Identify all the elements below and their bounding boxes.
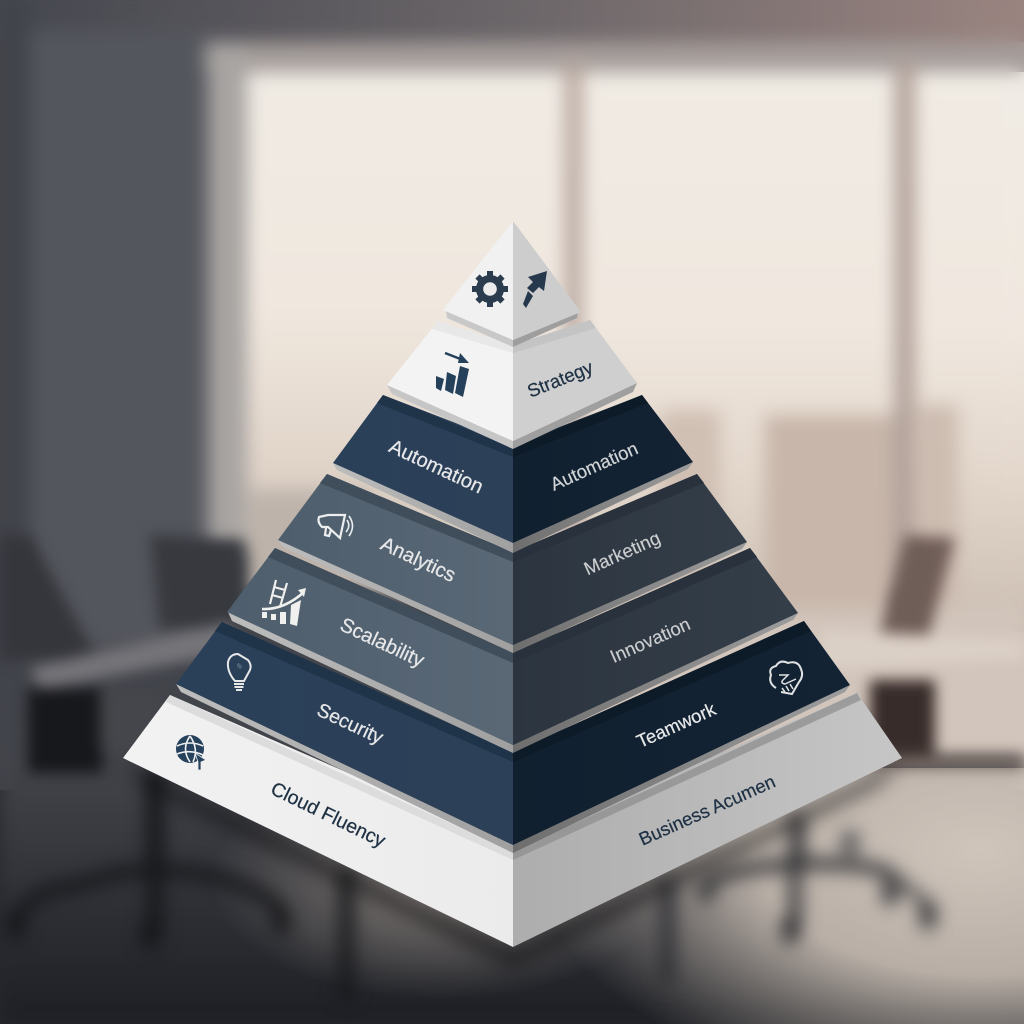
- icon: gear: [472, 271, 508, 307]
- pyramid: [123, 221, 902, 947]
- label: Automation (left): Automation: [386, 436, 486, 498]
- label: Analytics: Analytics: [377, 533, 459, 587]
- label: Cloud Fluency: Cloud Fluency: [267, 778, 389, 852]
- label: Strategy: Strategy: [524, 356, 597, 402]
- label: Security: Security: [313, 699, 387, 749]
- tier 3: navy: [333, 395, 693, 553]
- tier 5: grey: [227, 548, 798, 753]
- tier 7: base: [123, 693, 902, 947]
- label: Business Acumen: Business Acumen: [636, 770, 778, 850]
- label: Teamwork: Teamwork: [633, 698, 719, 752]
- icon: diagonal arrow: [523, 271, 547, 308]
- icon: megaphone: [318, 515, 352, 538]
- label: Automation (right): Automation: [547, 437, 641, 495]
- label: Innovation: Innovation: [607, 613, 693, 667]
- tier 4: grey: [278, 474, 747, 653]
- pyramid drop shadow: [123, 762, 902, 968]
- tier 1: apex: [443, 221, 581, 347]
- icon: globe with cursor: [176, 735, 206, 770]
- label: Marketing: Marketing: [581, 527, 663, 579]
- label: Scalability: Scalability: [337, 614, 427, 672]
- tier 6: navy: [176, 621, 850, 853]
- icon: cloud handshake: [770, 662, 802, 694]
- icon: light bulb: %: [235, 663, 243, 671]
- icon: ladder and growth chart: [262, 580, 306, 626]
- icon: bar chart with arrow: [436, 353, 469, 397]
- blurred chair bases: [8, 770, 936, 1000]
- icon: light bulb: [228, 654, 251, 690]
- tier 2: white: [387, 320, 637, 449]
